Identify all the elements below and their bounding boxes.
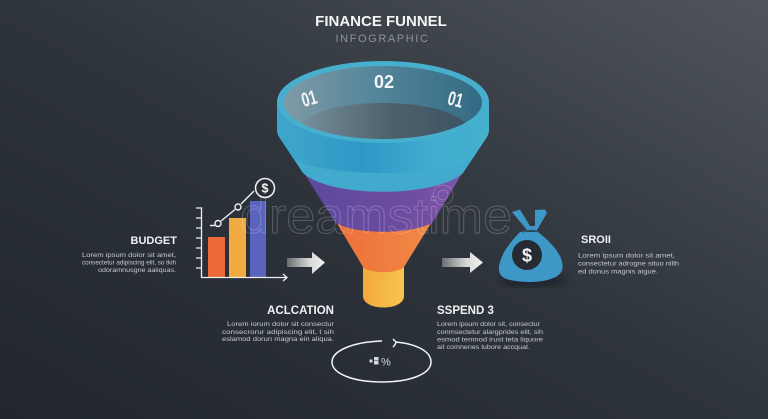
watermark spiral: [433, 185, 453, 205]
bar orange: [208, 237, 225, 277]
heading: sroi: SROII: [581, 234, 611, 246]
bag knot ties: [512, 210, 547, 230]
funnel rim outer wall: [277, 102, 489, 173]
text block: sroi: [578, 234, 679, 276]
funnel interior floor: [302, 103, 466, 139]
heading: budget: BUDGET: [131, 235, 177, 247]
title: [315, 13, 447, 45]
heading: allocation: ACLCATION: [267, 305, 334, 317]
spend body text: Lorem ipsum dolor sit, consectur: [437, 321, 541, 328]
funnel: [277, 61, 489, 308]
watermark: dreamstime: [240, 188, 512, 244]
allocation body text: consecrorur adipiscing elit, t sih: [222, 329, 334, 336]
subtitle: INFOGRAPHIC: [336, 33, 430, 45]
right arrow: [442, 252, 483, 273]
bar yellow: [229, 218, 246, 277]
spend body text: esmod temnod irust teta liquore: [437, 336, 543, 344]
bag dollar sign: $: [522, 246, 532, 266]
sroi body text: consectetur adrogne situo nlllh: [578, 260, 679, 268]
bag coin: [512, 240, 542, 270]
trend nodes: [215, 204, 241, 226]
sroi body text: [578, 252, 679, 276]
icon: bar chart: [196, 178, 287, 281]
budget body text: [82, 252, 176, 274]
percent icon: %: [381, 356, 391, 368]
chart axes: [196, 208, 287, 281]
funnel tier: blue band: [291, 155, 475, 192]
text block: allocation: [222, 305, 335, 343]
number 02: 02: [374, 72, 394, 92]
left arrow: [287, 252, 325, 274]
ring outline: [332, 339, 431, 382]
allocation body text: eslamod dorun magna ein aliqua.: [222, 336, 334, 343]
percent ring: [332, 339, 431, 382]
funnel rim top: [277, 61, 489, 143]
icon: dollar coin: $: [262, 182, 269, 196]
allocation body text: Lorem iorum dolor sit consectur: [227, 321, 335, 328]
allocation body text: [222, 321, 335, 343]
bar blue: [250, 201, 266, 277]
funnel tier: purple: [302, 170, 464, 232]
funnel numbers: [299, 72, 466, 112]
budget body text: Lorem ipsum dolor sit amet,: [82, 252, 176, 259]
text block: spend 3: [437, 305, 543, 351]
text block: budget: [82, 235, 177, 274]
heading: spend 3: SSPEND 3: [437, 305, 494, 317]
funnel tier: orange: [335, 220, 433, 272]
bag shadow: [499, 275, 567, 285]
spend body text: ait comnenes lubore accquat.: [437, 344, 530, 351]
spend body text: [437, 321, 543, 351]
icon: money bag: [499, 210, 567, 285]
number 01 right: 01: [446, 87, 466, 112]
funnel interior: [284, 66, 482, 139]
number 01 left: 01: [299, 86, 320, 112]
title: FINANCE FUNNEL: [315, 13, 447, 30]
budget body text: consectetur adipiscing elit, so tkih: [82, 260, 176, 266]
bag tie band: [522, 230, 538, 232]
trend line: [210, 191, 254, 226]
spend body text: conmsectetur alargprides elit, sih: [437, 329, 543, 336]
budget body text: odoramnusgne aaliquas.: [98, 267, 176, 274]
sroi body text: ed donus magnis aigue.: [578, 268, 658, 276]
funnel spout: yellow: [363, 262, 404, 308]
sroi body text: Lorem ipsum dolor sit amet,: [578, 252, 675, 260]
bag body: [499, 232, 563, 282]
